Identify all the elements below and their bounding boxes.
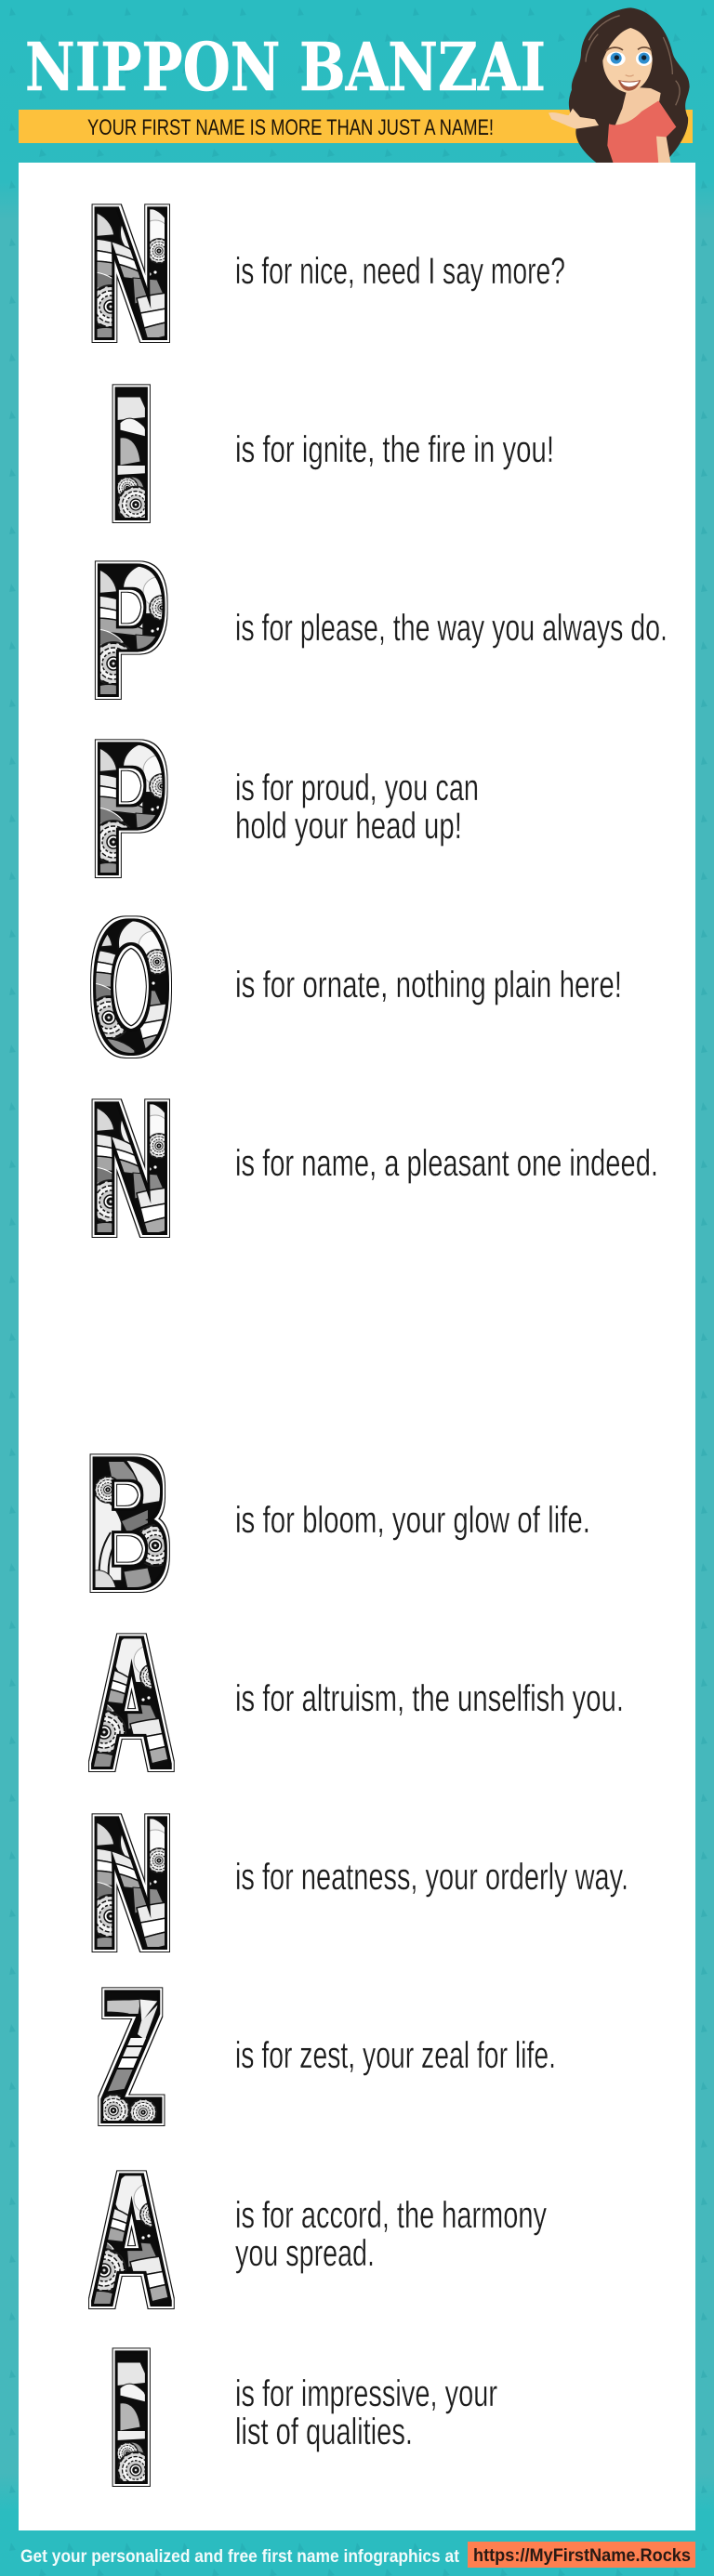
letter N: N bbox=[89, 1065, 172, 1272]
letter I: I bbox=[105, 350, 158, 558]
sentence: is for impressive, your bbox=[235, 2373, 497, 2414]
letter O: O bbox=[92, 884, 171, 1091]
row: O is for ornate bbox=[92, 884, 622, 1091]
row: P is for proud bbox=[93, 705, 479, 913]
letter N: N bbox=[89, 170, 172, 377]
sentence: is for accord, the harmony bbox=[235, 2195, 547, 2236]
sentence: is for bloom, your glow of life. bbox=[235, 1500, 590, 1541]
letter A: A bbox=[91, 1599, 172, 1807]
row: N is for neatness bbox=[89, 1780, 628, 1987]
title: NIPPON BANZAI bbox=[25, 28, 546, 106]
illustration: cartoon woman presenting bbox=[549, 7, 690, 164]
sentence: is for zest, your zeal for life. bbox=[235, 2035, 556, 2076]
row: I is for ignite bbox=[105, 350, 554, 558]
letter A: A bbox=[91, 2136, 172, 2344]
row: A is for altruism bbox=[91, 1599, 624, 1807]
row: B is for bloom bbox=[87, 1420, 590, 1627]
row: Z is for zest bbox=[100, 1953, 556, 2161]
row: P is for please bbox=[93, 527, 668, 734]
footer text: Get your personalized and free first name infographics at bbox=[20, 2547, 460, 2567]
letter Z: Z bbox=[100, 1953, 163, 2161]
row: N is for name bbox=[89, 1065, 658, 1272]
sentence continued: hold your head up! bbox=[235, 806, 462, 847]
url badge: https://MyFirstName.Rocks bbox=[473, 2546, 691, 2566]
sentence: is for nice, need I say more? bbox=[235, 251, 565, 292]
row: N is for nice bbox=[89, 170, 565, 377]
letter I: I bbox=[105, 2314, 158, 2521]
letter N: N bbox=[89, 1780, 172, 1987]
row: I is for impressive bbox=[105, 2314, 497, 2521]
yellow tagline banner: YOUR FIRST NAME IS MORE THAN JUST A NAME! bbox=[87, 115, 494, 140]
sentence: is for ignite, the fire in you! bbox=[235, 429, 554, 470]
letter B: B bbox=[87, 1420, 169, 1627]
row: A is for accord bbox=[91, 2136, 547, 2344]
sentence continued: list of qualities. bbox=[235, 2412, 413, 2452]
letter P: P bbox=[93, 705, 166, 913]
sentence: is for proud, you can bbox=[235, 768, 479, 808]
footer call to action bbox=[20, 2542, 695, 2568]
letter P: P bbox=[93, 527, 166, 734]
sentence continued: you spread. bbox=[235, 2233, 375, 2274]
yellow tagline banner bbox=[19, 110, 693, 143]
